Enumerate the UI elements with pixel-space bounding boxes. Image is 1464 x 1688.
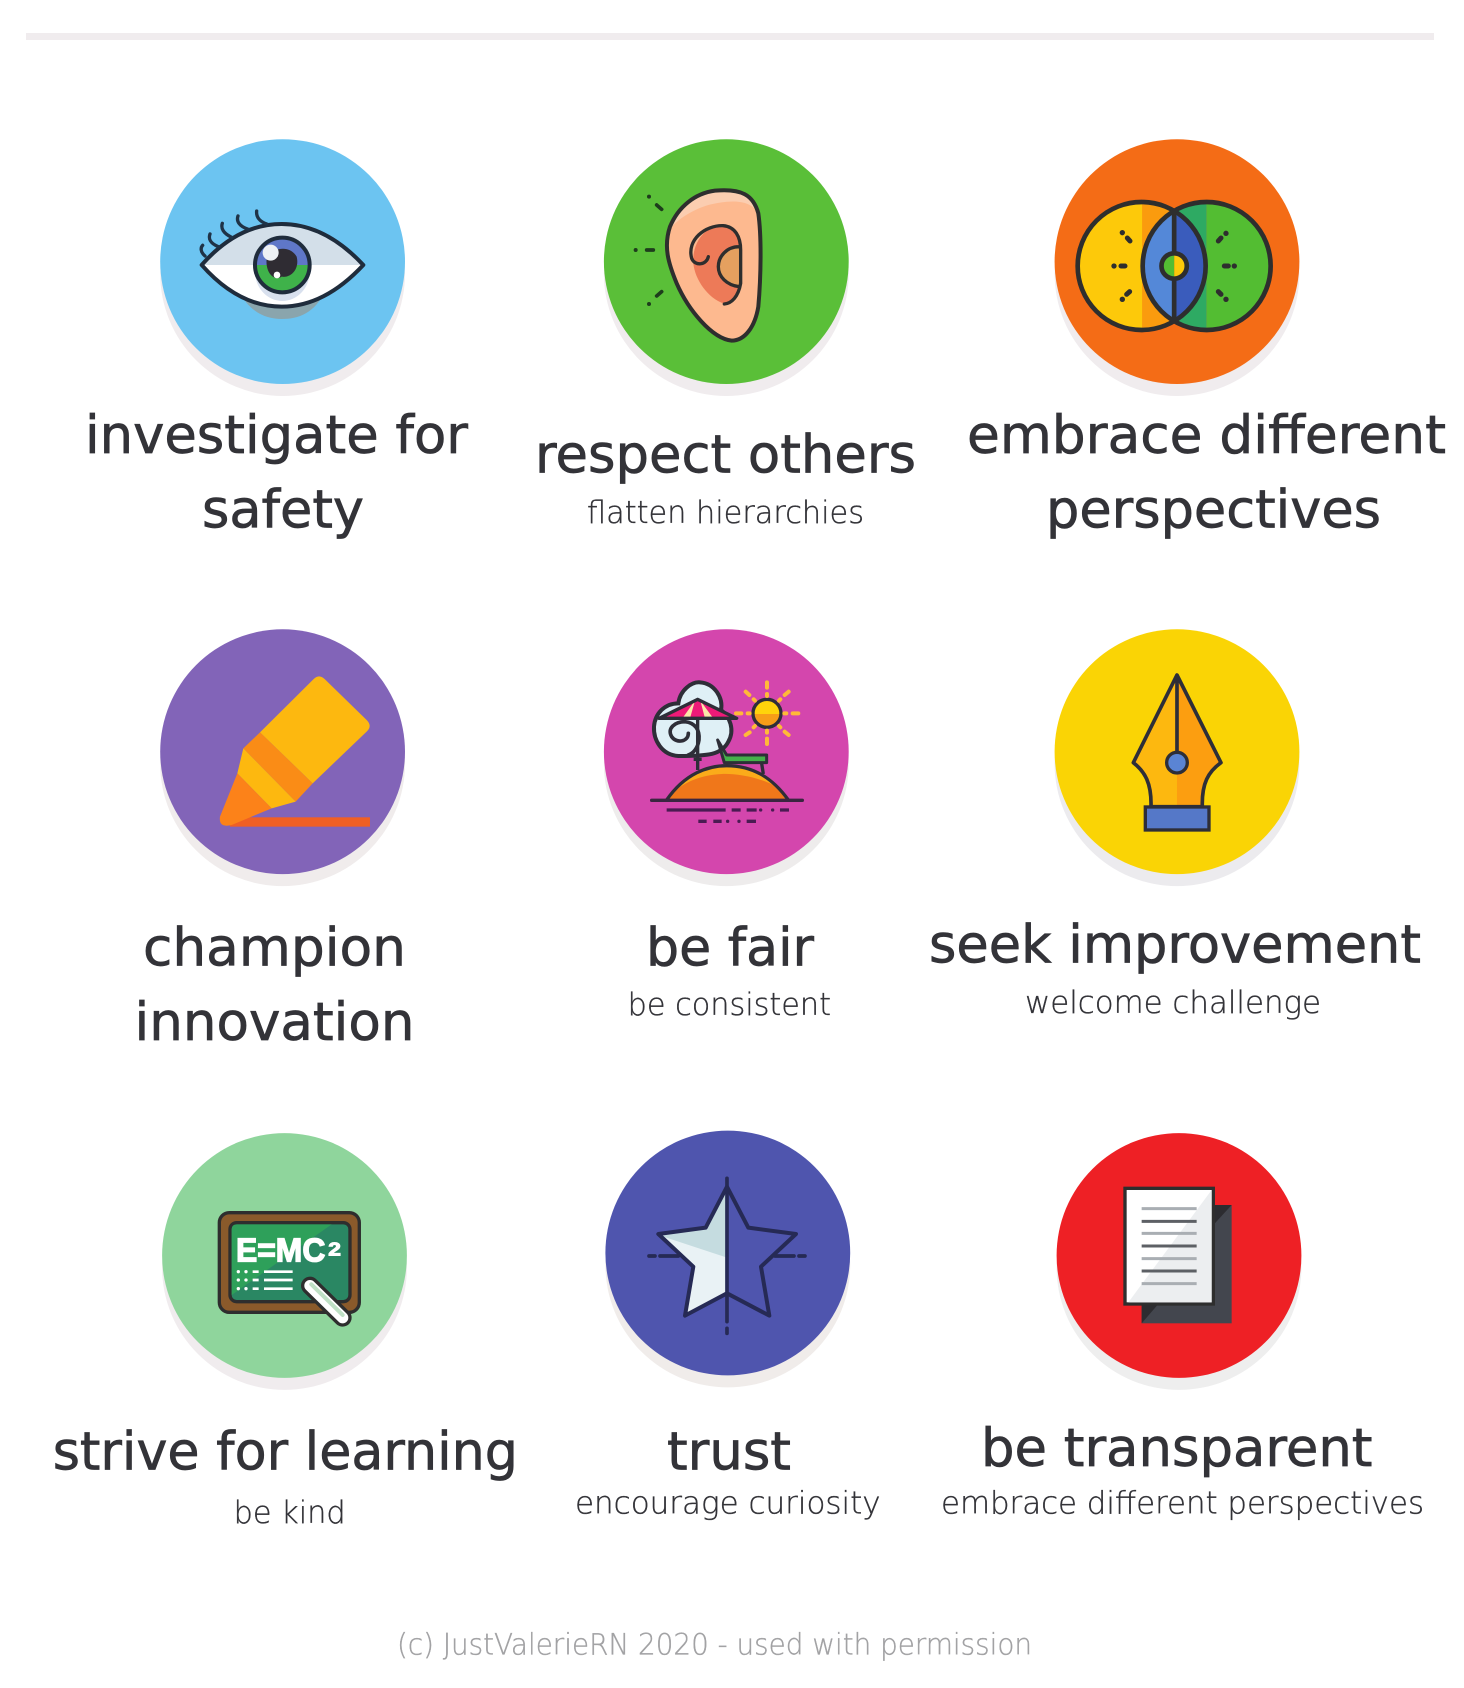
panel: trust [575, 1131, 881, 1522]
heading: trust: trust [667, 1422, 791, 1482]
heading: be fair: be fair [646, 918, 814, 979]
icon: fountain pen nib [1055, 629, 1299, 886]
icon: eye [160, 139, 405, 396]
heading: investigate for safety: investigate for [85, 405, 468, 466]
heading: seek improvement: seek improvement [929, 914, 1421, 975]
heading: be transparent: be transparent [981, 1418, 1372, 1479]
subheading: encourage curiosity: encourage curiosity [575, 1486, 881, 1522]
panel: embrace different perspectives [967, 139, 1446, 540]
panel: be transparent [941, 1133, 1424, 1522]
icon: half-filled star [605, 1131, 850, 1387]
icon: overlapping circles [1055, 139, 1299, 396]
heading: champion innovation: champion [143, 918, 406, 979]
heading: embrace different perspectives: embrace different [967, 405, 1446, 466]
icon: documents [1057, 1133, 1301, 1390]
heading: champion innovation [134, 918, 414, 1053]
heading: respect others: respect others [535, 425, 916, 486]
subheading: flatten hierarchies: flatten hierarchies [587, 495, 864, 531]
panel: strive for learning [53, 1133, 518, 1531]
icon: highlighter pencil [160, 629, 405, 886]
panel: respect others [535, 139, 916, 531]
subheading: welcome challenge: welcome challenge [1025, 985, 1321, 1021]
icon: chalkboard [162, 1133, 407, 1390]
panel: investigate for safety [85, 139, 468, 540]
heading: investigate for safety: safety [202, 480, 364, 540]
heading: embrace different perspectives [967, 405, 1446, 540]
heading: embrace different perspectives: perspectives [1046, 480, 1381, 540]
icon: chalkboard: E=MC [236, 1233, 325, 1270]
panel: be fair [604, 629, 849, 1023]
subheading: be kind: be kind [234, 1495, 346, 1531]
subheading: embrace different perspectives: embrace different perspectives [941, 1486, 1424, 1522]
panel: champion innovation [134, 629, 414, 1053]
panel: seek improvement [929, 629, 1421, 1021]
icon: chalkboard: 2 [328, 1239, 341, 1260]
heading: investigate for safety [85, 405, 468, 540]
subheading: be consistent: be consistent [628, 987, 831, 1023]
heading: strive for learning: strive for learning [53, 1422, 518, 1482]
footer credit: (c) JustValerieRN 2020 - used with permission [397, 1628, 1032, 1662]
icon: beach island [604, 629, 849, 886]
icon: ear [604, 139, 849, 396]
heading: champion innovation: innovation [134, 992, 414, 1053]
